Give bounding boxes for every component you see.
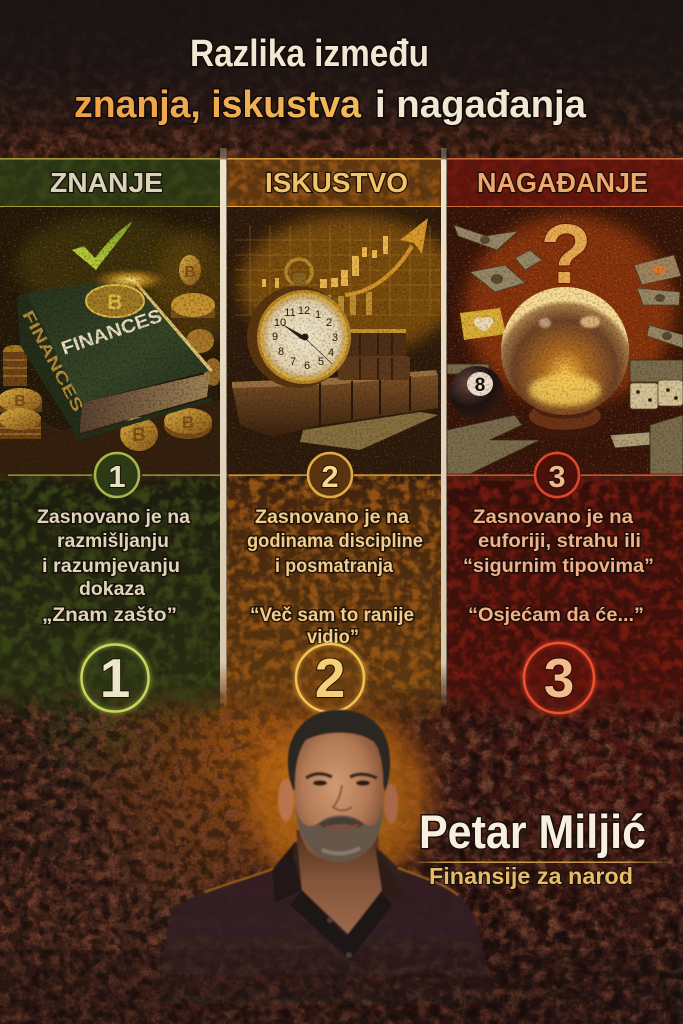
money stacks	[447, 360, 683, 474]
pocket watch: 2	[326, 317, 332, 329]
title: Razlika između	[190, 33, 429, 75]
question mark: ?	[540, 207, 592, 301]
crystal ball	[501, 287, 629, 415]
title	[74, 33, 587, 126]
author name	[412, 805, 674, 889]
pocket watch: 12	[298, 305, 310, 317]
cover label: FINANCES	[59, 306, 165, 360]
title: znanja, iskustva	[74, 84, 362, 126]
text: iskustvo description: i posmatranja	[275, 556, 393, 577]
text: iskustvo description: godinama discipline	[247, 531, 423, 552]
pocket watch: 3	[332, 332, 338, 344]
mouth	[326, 825, 358, 828]
author subtitle: Finansije za narod	[429, 863, 633, 889]
stacked books	[232, 329, 438, 450]
pocket watch: 9	[272, 331, 278, 343]
text: znanje description: dokaza	[79, 579, 145, 600]
badge: small 2: 2	[321, 459, 339, 494]
crystal ball stand	[527, 408, 601, 439]
badge: small 1	[8, 453, 220, 497]
banknotes floating	[454, 225, 683, 348]
title: i nagađanja	[375, 84, 587, 126]
badge: large 3: 3	[544, 647, 574, 709]
text: iskustvo description: vidio”	[307, 627, 359, 648]
card with heart	[460, 308, 506, 340]
illustration: finance book with coins: B	[14, 393, 26, 410]
text: nagađanje description: euforiji, strahu ili	[478, 531, 641, 552]
coin on cover	[86, 285, 144, 317]
badge: large 3	[524, 643, 594, 713]
spine label: FINANCES	[18, 308, 86, 415]
candlesticks	[262, 236, 388, 315]
collar left	[272, 842, 302, 903]
ears	[278, 779, 294, 821]
badge: large 1: 1	[100, 647, 130, 709]
illustration: finance book with coins	[0, 207, 235, 474]
buttons	[327, 917, 352, 958]
pocket watch: 10	[274, 317, 286, 329]
moustache and chin highlights	[318, 817, 364, 828]
text: iskustvo description	[247, 507, 423, 648]
arrow rising	[345, 218, 428, 295]
heading: iskustvo: ISKUSTVO	[265, 167, 408, 198]
shirt	[158, 842, 494, 1020]
beard	[295, 805, 383, 862]
heading: znanje: ZNANJE	[50, 167, 163, 198]
illustration: finance book with coins: B	[184, 264, 196, 281]
author name: Petar Miljić	[419, 805, 646, 858]
text: znanje description: Zasnovano je na	[37, 507, 190, 528]
portrait: Petar Miljić	[158, 710, 494, 1020]
heading: nagađanje: NAGAĐANJE	[477, 167, 648, 198]
pocket watch: 4	[328, 347, 334, 359]
illustration: finance book with coins: B	[107, 291, 123, 314]
badge: small 3: 3	[548, 459, 566, 494]
badge: large 2	[296, 644, 364, 712]
placket	[290, 890, 392, 960]
chart grid	[235, 225, 440, 315]
illustration: pocket watch and books	[227, 207, 460, 474]
dice	[630, 380, 683, 409]
text: nagađanje description	[463, 507, 654, 626]
panel: znanje	[0, 158, 235, 724]
neck	[296, 830, 382, 934]
face	[295, 733, 383, 860]
text: iskustvo description: Zasnovano je na	[255, 507, 409, 528]
book pages	[80, 373, 210, 433]
text: iskustvo description: “Več sam to ranije	[250, 605, 414, 626]
text: znanje description: razmišljanju	[57, 531, 169, 552]
coin stacks	[0, 255, 222, 451]
panel: nagađanje	[447, 158, 683, 724]
pocket watch: 6	[304, 360, 310, 372]
text: znanje description: i razumjevanju	[42, 556, 180, 577]
text: nagađanje description: Zasnovano je na	[473, 507, 633, 528]
pocket watch: 8	[278, 346, 284, 358]
panel: iskustvo	[227, 158, 460, 724]
column dividers	[220, 148, 446, 708]
book cover	[27, 277, 213, 403]
badge: small 3	[447, 453, 683, 497]
icon: check mark	[72, 221, 133, 270]
eight ball	[450, 366, 504, 420]
brows	[306, 774, 377, 778]
hair	[288, 710, 390, 792]
shoulder highlights	[205, 868, 458, 895]
eyes	[313, 780, 370, 786]
cover glow	[94, 268, 165, 291]
collar right	[375, 845, 410, 905]
badge: large 2: 2	[315, 647, 345, 709]
pocket watch: 5	[318, 356, 324, 368]
illustration: finance book with coins: B	[132, 425, 146, 446]
pocket watch: 11	[284, 307, 296, 319]
book spine	[17, 293, 83, 438]
eight ball: 8	[475, 375, 485, 396]
text: nagađanje description: “sigurnim tipovima”	[463, 556, 654, 577]
text: znanje description	[37, 507, 190, 626]
text: nagađanje description: “Osjećam da će...”	[468, 605, 644, 626]
illustration: finance book with coins: B	[182, 413, 194, 432]
nose	[333, 785, 352, 810]
text: znanje description: „Znam zašto”	[42, 605, 177, 626]
badge: large 1	[82, 644, 148, 712]
illustration: crystal ball and money	[447, 207, 683, 474]
badge: small 2	[229, 453, 441, 497]
pocket watch: 7	[290, 356, 296, 368]
pocket watch: 1	[315, 309, 321, 321]
badge: small 1: 1	[108, 459, 126, 494]
pocket watch	[247, 259, 351, 388]
